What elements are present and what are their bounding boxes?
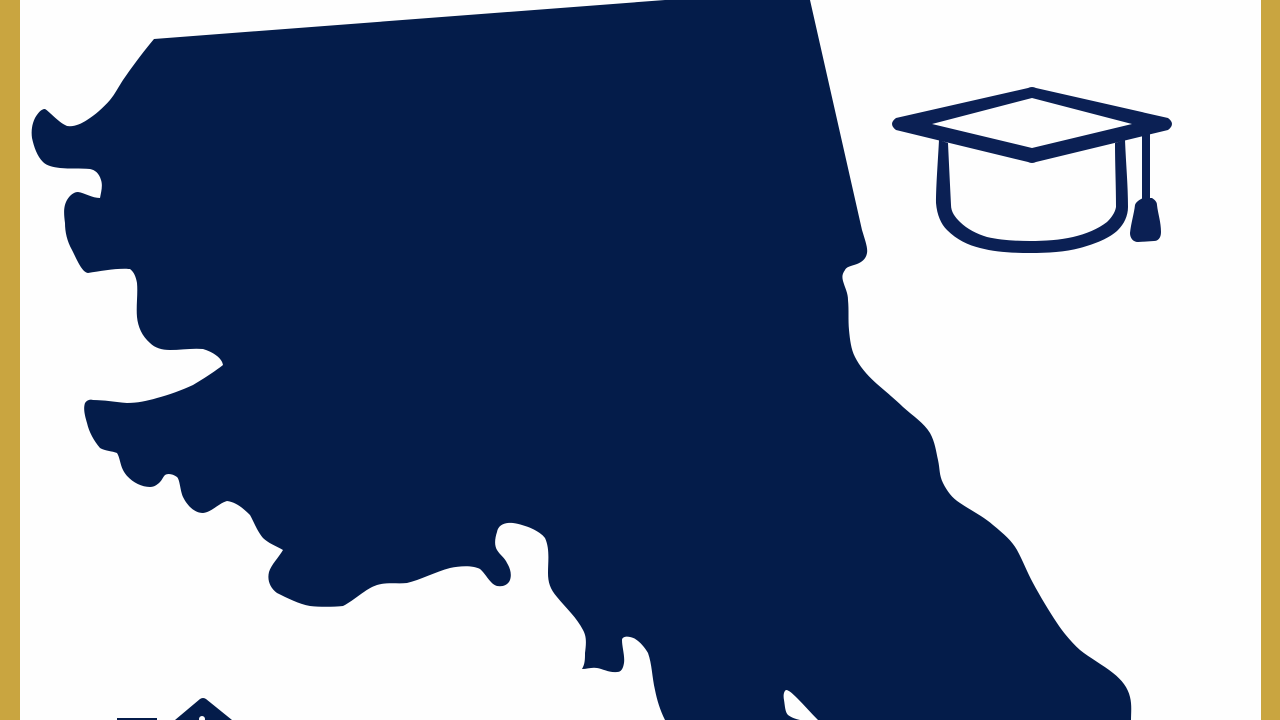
roof opening xyxy=(199,716,205,720)
cap board xyxy=(892,87,1172,163)
small bar xyxy=(117,718,157,720)
icon: partial house at bottom edge xyxy=(117,698,232,720)
cap body xyxy=(936,140,1128,253)
gold border: right xyxy=(1261,0,1280,720)
tassel cord xyxy=(1142,128,1150,200)
icon: graduation cap xyxy=(892,87,1172,253)
house roof xyxy=(175,698,232,720)
gold border: left xyxy=(0,0,20,720)
tassel xyxy=(1130,198,1161,242)
